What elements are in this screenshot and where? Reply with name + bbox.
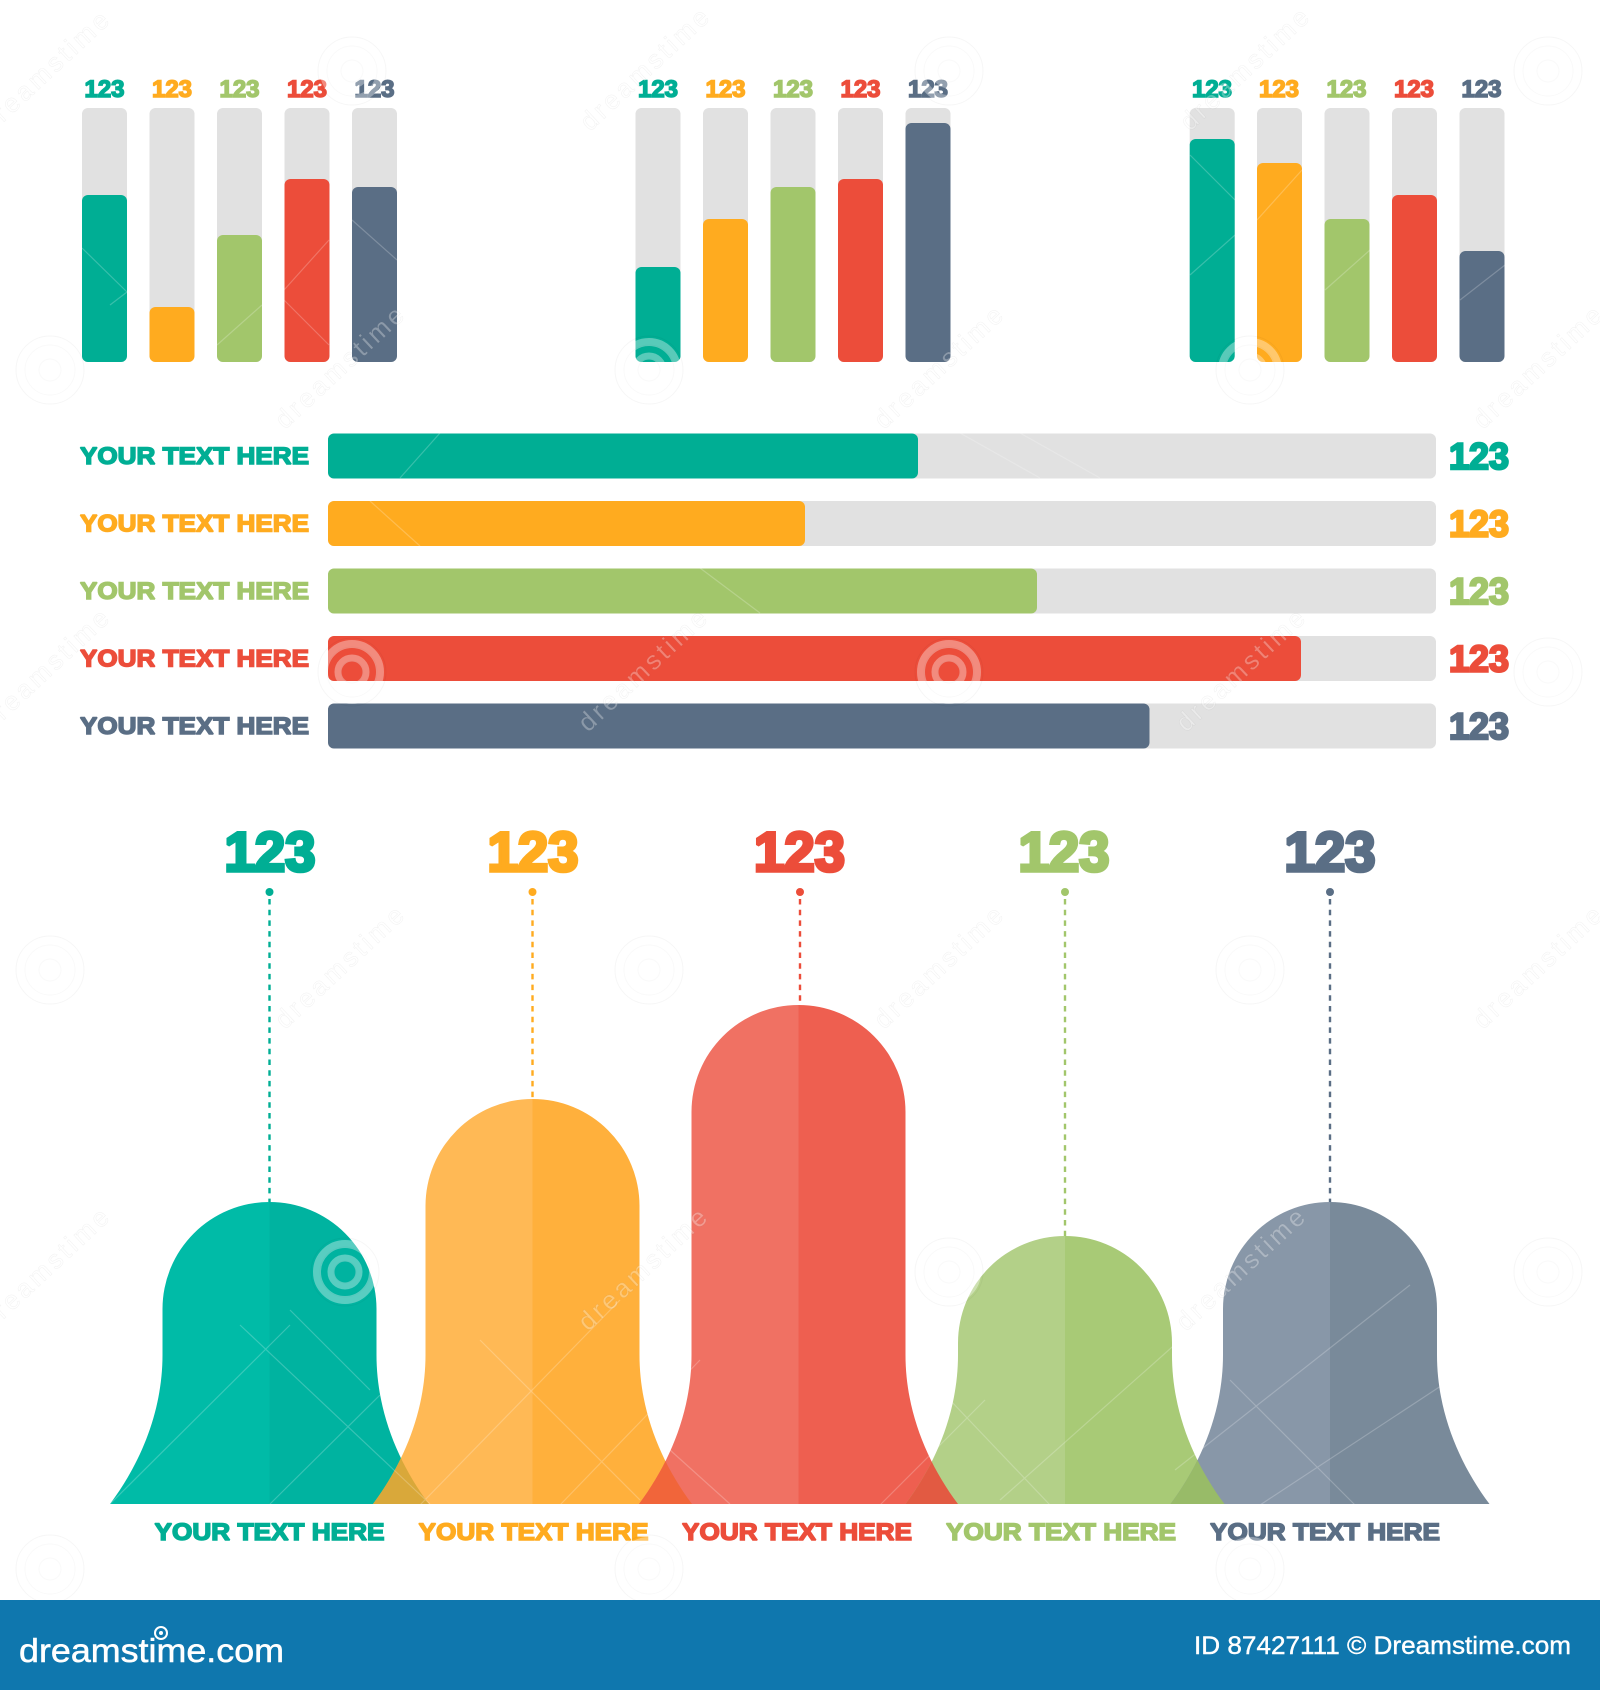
text: dreamstime xyxy=(868,300,1009,434)
bell chart labels xyxy=(154,1519,1440,1546)
bell chart labels: YOUR TEXT HERE xyxy=(682,1519,912,1546)
bell overlaps xyxy=(373,1458,1224,1504)
footer band xyxy=(0,1600,1600,1690)
bell chart values: 123 xyxy=(488,820,578,883)
value labels: 123 xyxy=(354,76,394,103)
row: slate: 123 xyxy=(1449,706,1509,747)
footer credit: ID 87427111 © Dreamstime.com xyxy=(1194,1632,1571,1660)
text: dreamstime xyxy=(574,2,715,136)
value labels: 123 xyxy=(84,76,124,103)
footer logo: dreamstime.com xyxy=(19,1632,284,1669)
text: dreamstime xyxy=(1170,1202,1311,1336)
value labels: 123 xyxy=(908,76,948,103)
row: teal: 123 xyxy=(1449,436,1509,477)
value labels: 123 xyxy=(773,76,813,103)
text: dreamstime xyxy=(269,900,410,1034)
column fills xyxy=(82,179,397,362)
row: slate xyxy=(80,704,1509,748)
bell chart labels: YOUR TEXT HERE xyxy=(946,1519,1176,1546)
bell: orange xyxy=(373,1099,692,1504)
row: slate: YOUR TEXT HERE xyxy=(80,713,309,740)
row: teal: YOUR TEXT HERE xyxy=(80,443,309,470)
bell chart values: 123 xyxy=(224,820,316,883)
text: dreamstime xyxy=(1170,603,1311,737)
column tracks xyxy=(82,108,397,362)
value labels: 123 xyxy=(1259,76,1299,103)
value labels xyxy=(638,76,948,103)
value labels: 123 xyxy=(1394,76,1434,103)
text: dreamstime xyxy=(868,900,1009,1034)
value labels: 123 xyxy=(1192,76,1232,103)
value labels: 123 xyxy=(1462,76,1502,103)
bell chart labels: YOUR TEXT HERE xyxy=(418,1519,648,1546)
row: red xyxy=(80,636,1509,681)
row: red: 123 xyxy=(1449,638,1509,680)
value labels: 123 xyxy=(1326,76,1366,103)
text: dreamstime xyxy=(572,1202,713,1336)
row: teal xyxy=(80,434,1509,478)
bell chart labels: YOUR TEXT HERE xyxy=(154,1519,384,1546)
bell: green xyxy=(906,1236,1224,1504)
value labels: 123 xyxy=(706,76,746,103)
column fills xyxy=(636,123,950,362)
text: dreamstime xyxy=(1174,2,1315,136)
bell chart values xyxy=(224,820,1376,883)
panel: top left column chart xyxy=(82,76,397,362)
text: dreamstime xyxy=(572,603,713,737)
panel: horizontal bar chart xyxy=(80,434,1509,748)
bell chart values: 123 xyxy=(1284,820,1376,883)
dotted leader lines xyxy=(266,888,1334,1236)
bell: red xyxy=(639,1005,958,1504)
value labels: 123 xyxy=(638,76,678,103)
bell: teal xyxy=(110,1202,429,1504)
column tracks xyxy=(1190,108,1504,362)
text: dreamstime xyxy=(269,300,410,434)
row: orange: 123 xyxy=(1449,504,1509,544)
panel: bell chart xyxy=(110,820,1490,1546)
column tracks xyxy=(636,108,950,362)
row: green: 123 xyxy=(1449,571,1509,612)
row: green: YOUR TEXT HERE xyxy=(80,578,309,605)
row: orange: YOUR TEXT HERE xyxy=(80,510,309,538)
row: orange xyxy=(80,501,1509,546)
value labels: 123 xyxy=(840,76,880,103)
value labels: 123 xyxy=(152,76,192,103)
bell chart values: 123 xyxy=(754,820,845,883)
bell chart labels: YOUR TEXT HERE xyxy=(1210,1519,1440,1546)
value labels: 123 xyxy=(287,76,327,103)
row: red: YOUR TEXT HERE xyxy=(80,646,309,672)
value labels: 123 xyxy=(220,76,260,103)
value labels xyxy=(84,76,394,103)
row: green xyxy=(80,568,1509,614)
panel: top right column chart xyxy=(1190,76,1504,362)
bell: slate xyxy=(1170,1202,1490,1504)
value labels xyxy=(1192,76,1502,103)
column fills xyxy=(1190,139,1504,362)
panel: top middle column chart xyxy=(636,76,950,362)
bell chart values: 123 xyxy=(1018,820,1110,883)
